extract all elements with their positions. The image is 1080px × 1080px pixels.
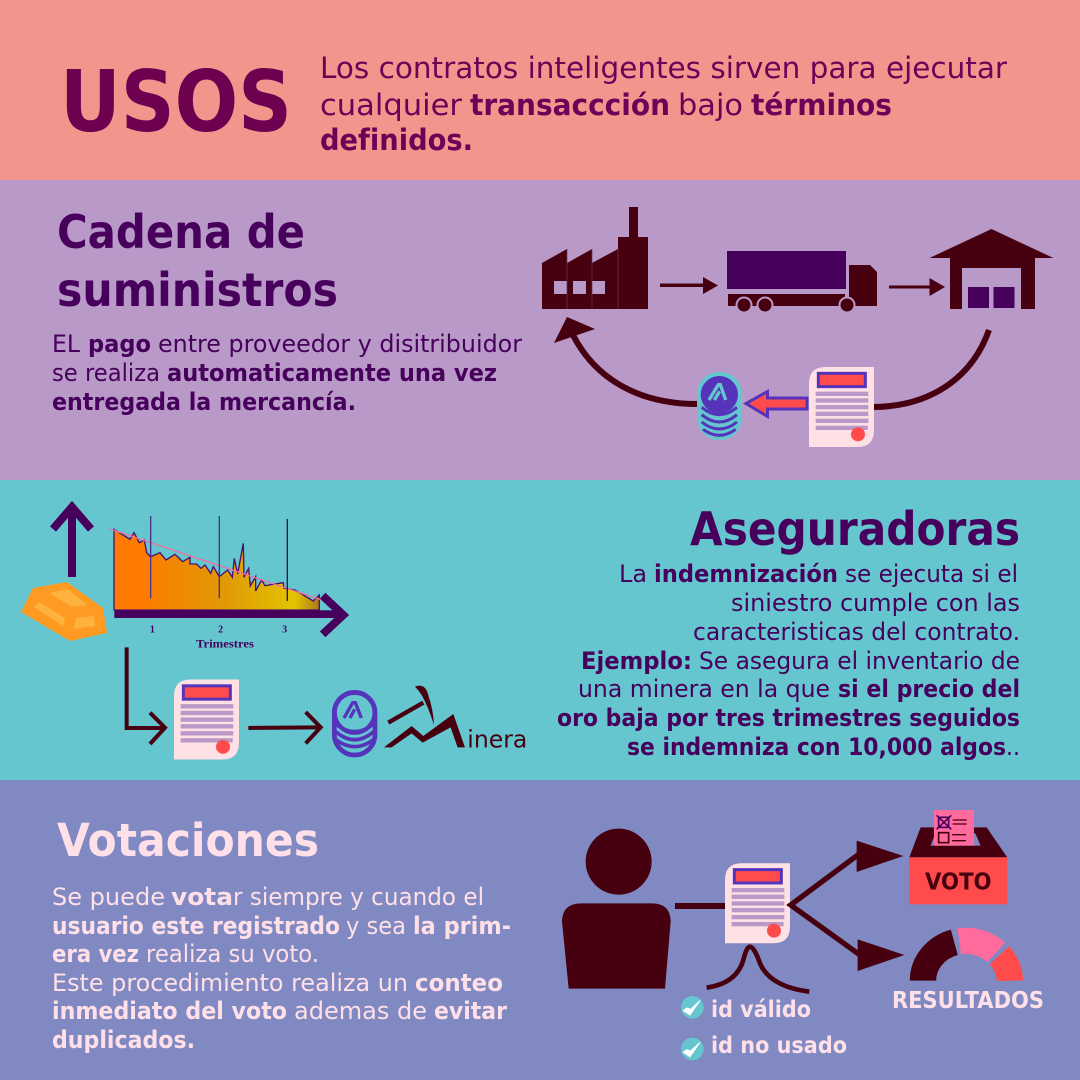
text block: aseguradoras description: se indemniza con 10,000 algos xyxy=(627,733,1006,761)
text block: cadena description: automaticamente una vez xyxy=(167,359,497,387)
arrow: chart to contract xyxy=(127,647,165,744)
text block: votaciones description: ademas de xyxy=(294,997,427,1025)
panel: aseguradoras xyxy=(0,480,1080,780)
icon: check id válido xyxy=(681,996,704,1019)
text block: aseguradoras description: una minera en la que xyxy=(578,675,830,703)
logo: minera xyxy=(384,686,527,753)
line chart: precio del oro por trimestres: Trimestres xyxy=(196,637,254,650)
title: USOS: USOS xyxy=(60,53,292,152)
line chart: precio del oro por trimestres: 2 xyxy=(218,625,223,636)
text block: votaciones description: y sea xyxy=(346,912,406,940)
text block: votaciones description: vota xyxy=(171,883,233,911)
text block: cadena description xyxy=(52,330,522,416)
text block: usos description: cualquier xyxy=(320,88,462,122)
text block: aseguradoras description: siniestro cumple con las xyxy=(731,589,1020,617)
text block: votaciones description: la prim- xyxy=(413,912,511,940)
icon: truck xyxy=(727,251,877,312)
heading: cadena de suministros xyxy=(57,205,338,317)
text block: usos description: términos xyxy=(751,88,892,122)
text block: cadena description: entregada la mercancía. xyxy=(52,388,356,416)
icon: algo coins xyxy=(334,692,375,755)
text block: votaciones description: conteo xyxy=(415,969,503,997)
icon: contract document xyxy=(174,680,239,759)
icon: factory xyxy=(542,207,648,309)
arrow: person to contract xyxy=(675,903,727,909)
heading: cadena de suministros: Cadena de xyxy=(57,205,305,259)
icon: person xyxy=(562,829,671,989)
heading: cadena de suministros: suministros xyxy=(57,263,338,317)
arrow: coins to factory curve xyxy=(554,317,698,404)
icon: ballot box xyxy=(909,810,1007,904)
icon: results gauge xyxy=(923,941,1010,981)
heading: aseguradoras: Aseguradoras xyxy=(690,502,1020,556)
panel: cadena de suministros xyxy=(0,180,1080,480)
label: id no usado: id no usado xyxy=(711,1033,847,1059)
text block: usos description: transaccción xyxy=(470,88,670,122)
text block: votaciones description: usuario este registrado xyxy=(52,912,340,940)
label: resultados: RESULTADOS xyxy=(892,988,1044,1014)
text block: usos description xyxy=(320,51,1007,157)
text block: votaciones description: Este procedimiento realiza un xyxy=(52,969,408,997)
panel: votaciones xyxy=(0,780,1080,1080)
icon: contract arrow to coins xyxy=(746,392,807,416)
arrow: truck to warehouse xyxy=(889,278,945,296)
text block: aseguradoras description: Se asegura el inventario de xyxy=(699,647,1020,675)
text block: votaciones description: era vez xyxy=(52,940,139,968)
text block: aseguradoras description: .. xyxy=(1006,733,1020,761)
text block: usos description: bajo xyxy=(678,88,743,122)
text block: aseguradoras description: oro baja por tres trimestres seguidos xyxy=(557,704,1020,732)
text block: cadena description: se realiza xyxy=(52,359,160,387)
curve: contract to id checks xyxy=(707,947,809,992)
text block: usos description: Los contratos inteligentes sirven para ejecutar xyxy=(320,51,1007,85)
icon: contract document xyxy=(725,863,790,943)
panel: usos xyxy=(0,0,1080,180)
text block: votaciones description: duplicados. xyxy=(52,1026,195,1054)
arrow: warehouse to contract curve xyxy=(872,330,989,407)
icon: contract document xyxy=(809,367,874,447)
text block: usos description: definidos. xyxy=(320,123,473,157)
arrow: contract to coins xyxy=(248,712,321,743)
text block: votaciones description: realiza su voto. xyxy=(146,940,319,968)
label: id válido: id válido xyxy=(711,997,811,1023)
text block: aseguradoras description: se ejecuta si el xyxy=(845,560,1018,588)
text block: aseguradoras description xyxy=(557,560,1020,761)
icon: check id no usado xyxy=(681,1038,704,1060)
icon: ballot box: VOTO xyxy=(925,869,992,895)
text block: cadena description: entre proveedor y disitribuidor xyxy=(158,330,522,358)
text block: aseguradoras description: La xyxy=(619,560,647,588)
line chart: precio del oro por trimestres: 1 xyxy=(150,625,155,636)
text block: aseguradoras description: caracteristicas del contrato. xyxy=(693,618,1020,646)
icon: up arrow xyxy=(53,507,91,577)
icon: gold bar xyxy=(21,582,107,641)
text block: votaciones description xyxy=(52,883,511,1054)
line chart: precio del oro por trimestres: 3 xyxy=(282,625,287,636)
text block: aseguradoras description: indemnización xyxy=(654,560,838,588)
line chart: precio del oro por trimestres xyxy=(110,516,343,650)
text block: cadena description: EL xyxy=(52,330,81,358)
icon: algo coins xyxy=(697,372,742,440)
text block: cadena description: pago xyxy=(88,330,151,358)
logo: minera: inera xyxy=(467,725,527,753)
text block: aseguradoras description: si el precio del xyxy=(838,675,1020,703)
arrow: factory to truck xyxy=(660,277,718,294)
text block: votaciones description: Se puede xyxy=(52,883,165,911)
text block: votaciones description: r siempre y cuando el xyxy=(233,883,484,911)
text block: aseguradoras description: Ejemplo: xyxy=(581,647,692,675)
heading: votaciones: Votaciones xyxy=(57,814,319,867)
text block: votaciones description: evitar xyxy=(434,997,507,1025)
text block: votaciones description: inmediato del voto xyxy=(52,997,287,1025)
arrows: contract to voto and resultados xyxy=(791,841,904,971)
icon: warehouse xyxy=(930,229,1053,309)
